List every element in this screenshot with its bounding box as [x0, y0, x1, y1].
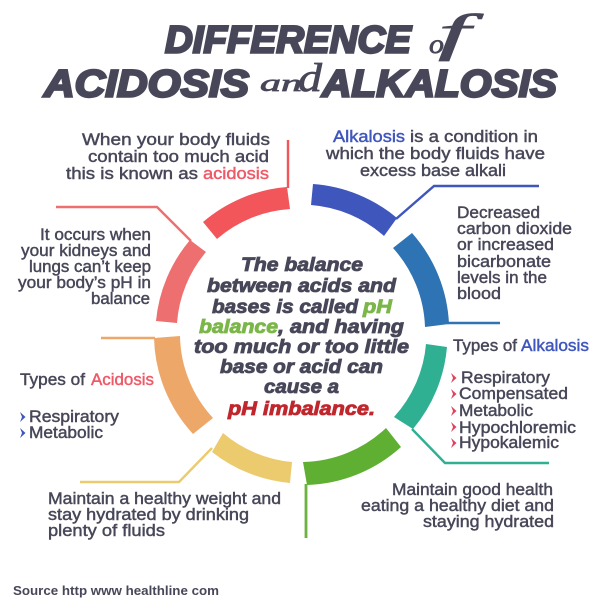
text block: carbon dioxide and bicarbonate: bicarbonate	[457, 253, 551, 271]
center text: pH balance: bases is called	[212, 296, 359, 318]
title: an	[260, 71, 302, 97]
list: types of alkalosis: Compensated	[459, 385, 568, 403]
text block: carbon dioxide and bicarbonate: levels in the	[457, 269, 547, 287]
center text: pH balance: base or acid can	[220, 356, 383, 378]
text block: acidosis definition: this is known as	[66, 165, 198, 183]
source line: Source http www healthline com	[13, 583, 219, 598]
text block: carbon dioxide and bicarbonate: blood	[457, 285, 501, 303]
segment: steel blue with leader line	[393, 233, 500, 327]
text block: acidosis definition: When your body fluids	[82, 131, 270, 149]
segment: yellow with leader line	[80, 433, 292, 483]
text block: alkalosis definition	[325, 128, 545, 180]
list: types of acidosis	[20, 371, 154, 442]
title: d	[298, 55, 323, 100]
text block: good health: eating a healthy diet and	[361, 497, 554, 515]
text block: carbon dioxide and bicarbonate: Decreased	[457, 204, 540, 222]
segment: teal with leader line	[394, 344, 549, 463]
text block: healthy weight: stay hydrated by drinking	[48, 506, 249, 524]
title: ACIDOSIS	[43, 64, 249, 106]
list: types of alkalosis: Respiratory	[461, 369, 551, 387]
text block: healthy weight: Maintain a healthy weight and	[48, 490, 281, 508]
text block: carbon dioxide and bicarbonate: carbon dioxide	[457, 220, 572, 238]
text block: kidneys and lungs: It occurs when	[40, 226, 151, 244]
segment: orange with leader line	[101, 336, 213, 434]
text block: kidneys and lungs: lungs can’t keep	[29, 258, 151, 276]
list: types of acidosis: Acidosis	[91, 371, 154, 389]
text block: acidosis definition: acidosis	[203, 165, 269, 183]
segment: green with leader line	[303, 428, 401, 538]
text block: alkalosis definition: Alkalosis	[333, 128, 405, 146]
list: types of alkalosis	[451, 337, 589, 452]
title: f	[438, 5, 484, 62]
list: types of alkalosis: Metabolic	[459, 402, 533, 420]
text block: acidosis definition: contain too much acid	[88, 148, 269, 166]
text block: kidneys and lungs	[18, 226, 151, 308]
text block: good health: Maintain good health	[392, 481, 553, 499]
segment: indigo with leader line	[311, 184, 539, 236]
list: types of alkalosis: Hypochloremic	[459, 419, 576, 437]
text block: good health: staying hydrated	[423, 513, 554, 531]
center text: pH balance: pH	[362, 296, 393, 318]
text block: good health	[361, 481, 554, 531]
text block: alkalosis definition: excess base alkali	[360, 162, 506, 180]
title	[43, 5, 557, 106]
text block: kidneys and lungs: your kidneys and	[21, 242, 151, 260]
segment: salmon with leader line	[56, 207, 206, 323]
text block: carbon dioxide and bicarbonate: or increased	[457, 236, 554, 254]
list: types of acidosis: Metabolic	[29, 424, 103, 442]
text block: alkalosis definition: is a condition in	[410, 128, 538, 146]
list: types of alkalosis: Types of	[453, 337, 517, 355]
center text: pH balance	[194, 254, 409, 420]
list: types of alkalosis: Alkalosis	[521, 337, 589, 355]
center text: pH balance: between acids and	[207, 275, 397, 297]
segment: red with leader line	[203, 140, 290, 239]
text block: carbon dioxide and bicarbonate	[457, 204, 572, 303]
donut ring with eight coloured segments and leader lines	[56, 140, 549, 538]
text block: kidneys and lungs: your body’s pH in	[18, 274, 151, 292]
text block: acidosis definition	[66, 131, 270, 183]
list: types of alkalosis: Hypokalemic	[459, 434, 559, 452]
center text: pH balance: The balance	[241, 254, 363, 276]
text block: kidneys and lungs: balance	[91, 290, 150, 308]
title: ALKALOSIS	[321, 64, 557, 106]
list: types of acidosis: Types of	[20, 371, 85, 389]
text block: healthy weight: plenty of fluids	[48, 522, 165, 540]
center text: pH balance: too much or too little	[194, 336, 409, 358]
text block: alkalosis definition: which the body fluids have	[325, 145, 545, 163]
center text: pH balance: cause a	[264, 376, 339, 398]
center text: pH balance: pH imbalance.	[227, 398, 375, 420]
center text: pH balance: balance	[199, 316, 278, 338]
list: types of acidosis: Respiratory	[29, 408, 120, 426]
title: DIFFERENCE	[165, 20, 413, 62]
center text: pH balance: , and having	[277, 316, 404, 338]
title: o	[429, 29, 444, 59]
text block: healthy weight	[48, 490, 281, 540]
